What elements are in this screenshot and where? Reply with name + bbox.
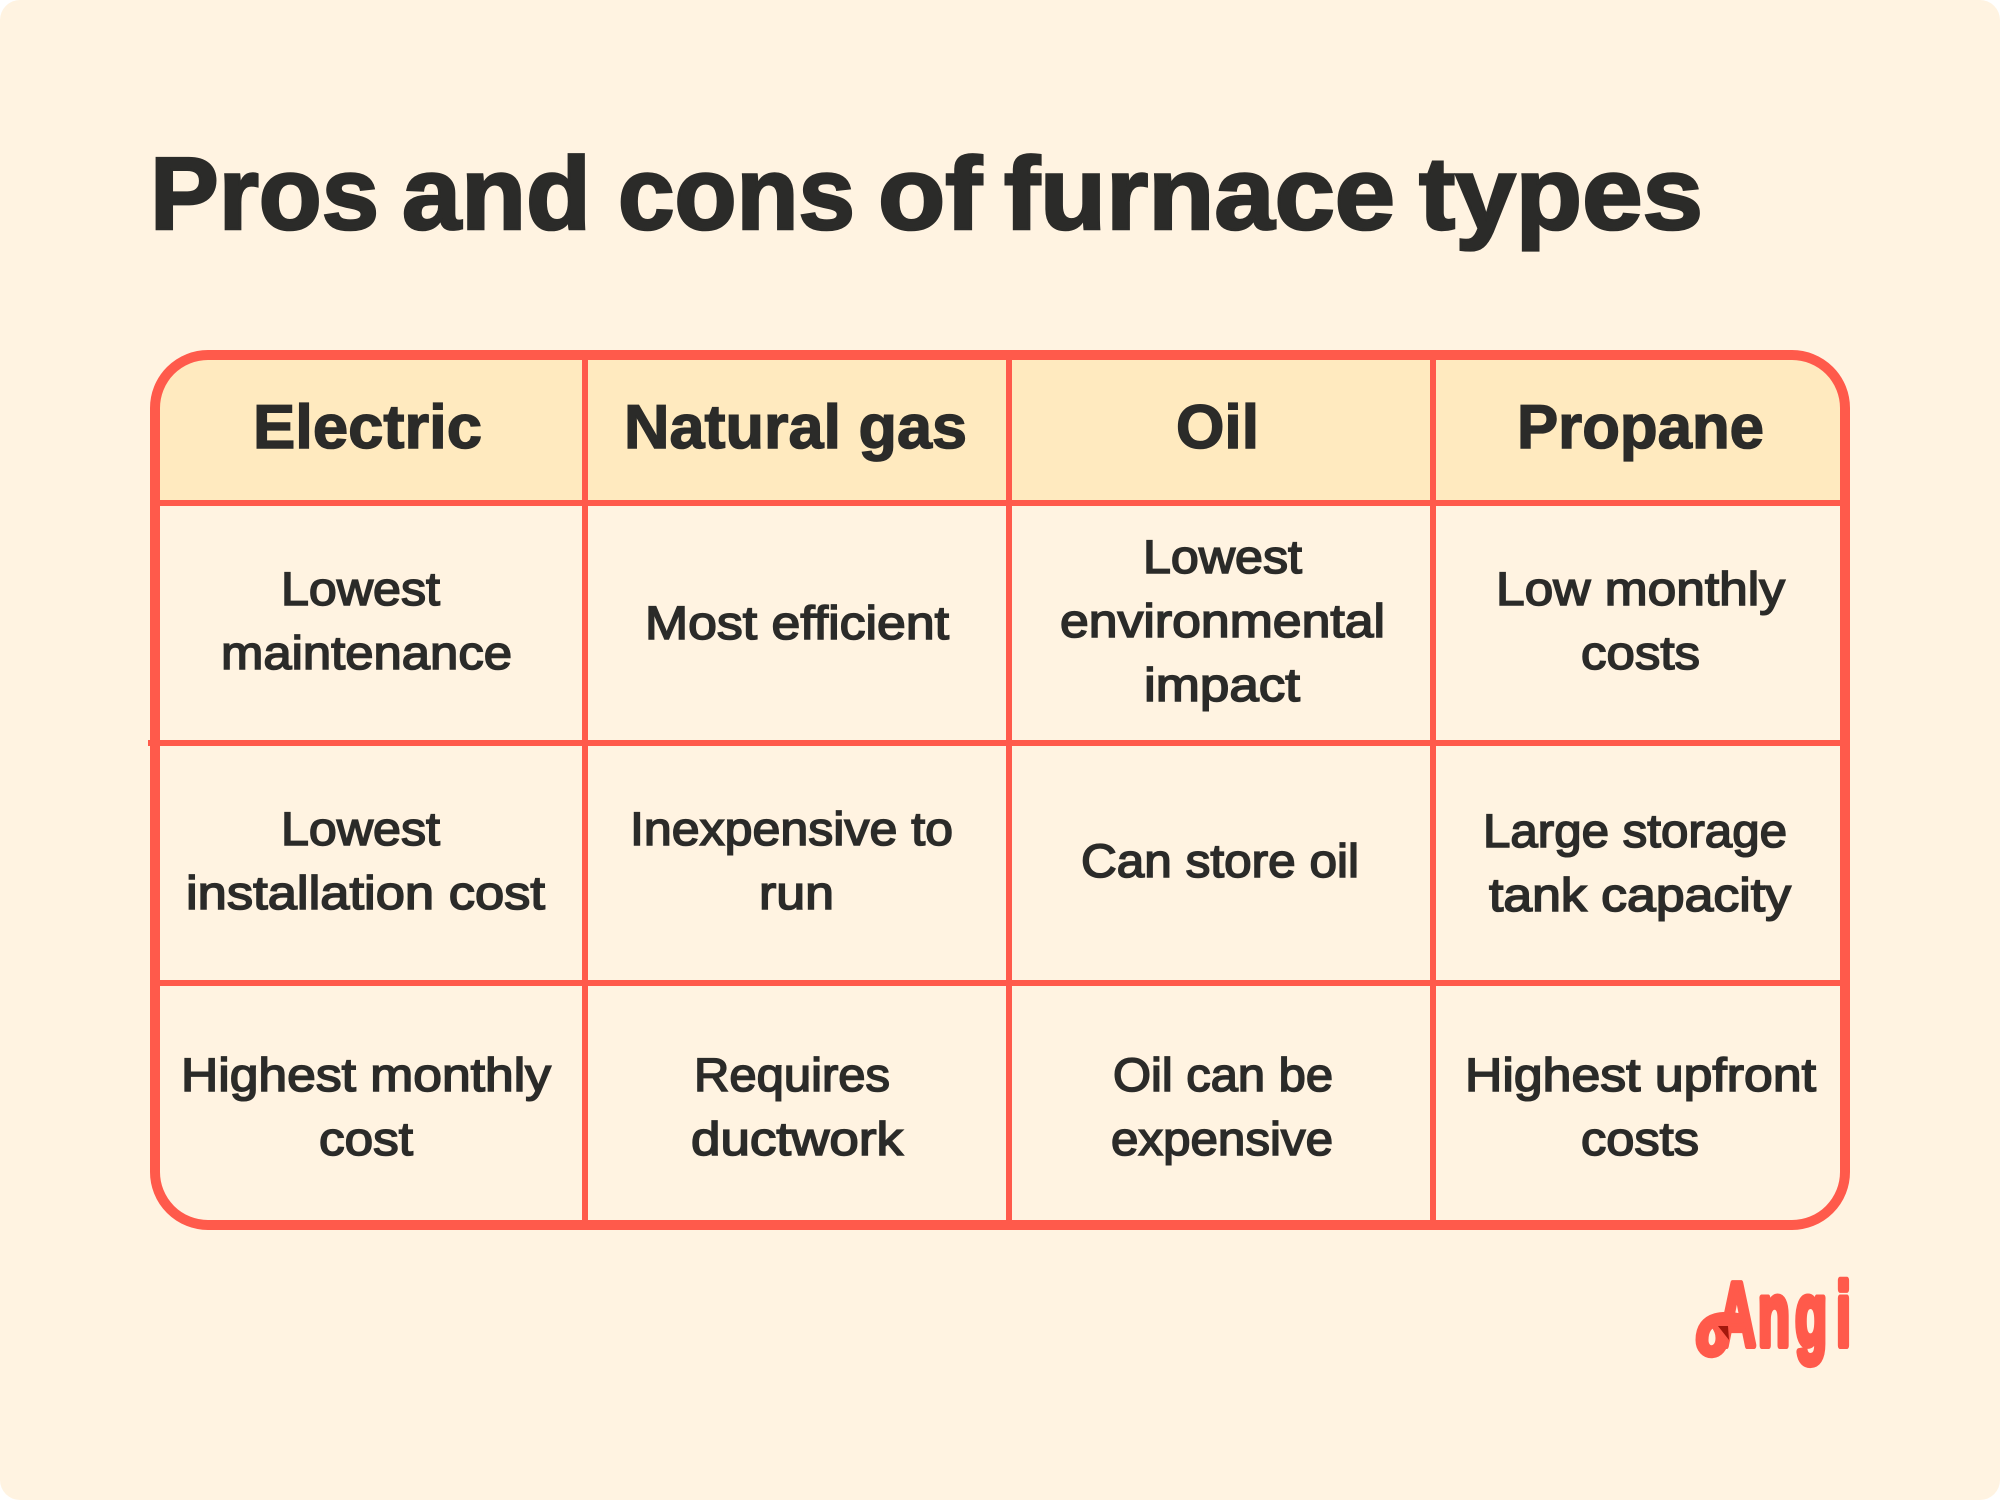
cell: Propane row 2: tank capacity — [1489, 868, 1792, 921]
table grid lines — [148, 355, 1845, 1225]
cell: Propane row 2: Large storage — [1483, 804, 1787, 857]
logo loop — [1702, 1318, 1745, 1352]
title: types — [1419, 136, 1703, 251]
cell: Oil row 3 — [1111, 1048, 1333, 1165]
cell: Propane row 1 — [1496, 562, 1786, 679]
logo loop shadow — [1718, 1326, 1729, 1340]
cell: Oil row 2: Can store oil — [1081, 834, 1359, 887]
title: and — [402, 136, 591, 251]
logo wordmark: Angi — [1718, 1266, 1851, 1366]
header row background — [155, 355, 1845, 500]
title: cons — [618, 136, 855, 251]
cell: Propane row 3: Highest upfront — [1465, 1048, 1816, 1101]
cell: Natural gas row 3 — [691, 1048, 904, 1165]
logo: Angi — [1702, 1266, 1851, 1366]
title: Pros — [150, 136, 379, 251]
header: Natural gas: Natural gas — [624, 393, 967, 462]
cell: Natural gas row 1: Most efficient — [645, 596, 949, 649]
cell: Electric row 3 — [181, 1048, 552, 1165]
table — [148, 355, 1845, 1225]
cell: Propane row 2 — [1483, 804, 1792, 921]
cell: Propane row 1: Low monthly — [1496, 562, 1786, 615]
cell: Electric row 3: cost — [319, 1112, 413, 1165]
title — [150, 136, 1703, 251]
header: Oil: Oil — [1176, 393, 1259, 462]
cell: Natural gas row 2: run — [759, 866, 834, 919]
title: furnace — [1004, 136, 1395, 251]
cell: Electric row 1: Lowest — [281, 562, 440, 615]
cell: Electric row 2 — [186, 802, 545, 919]
cell: Oil row 1: environmental — [1060, 594, 1385, 647]
table outer border — [155, 355, 1845, 1225]
cell: Natural gas row 3: Requires — [694, 1048, 890, 1101]
cell: Oil row 1: impact — [1144, 658, 1300, 711]
header: Electric: Electric — [253, 393, 482, 462]
cell: Electric row 1 — [221, 562, 512, 679]
cell: Oil row 3: expensive — [1111, 1112, 1333, 1165]
title: of — [878, 136, 983, 251]
cell: Natural gas row 2: Inexpensive to — [630, 802, 953, 855]
cell: Natural gas row 2 — [630, 802, 953, 919]
cell: Electric row 2: Lowest — [281, 802, 440, 855]
cell: Propane row 3: costs — [1581, 1112, 1699, 1165]
cell: Electric row 2: installation cost — [186, 866, 545, 919]
cell: Oil row 1 — [1060, 530, 1385, 711]
cell: Electric row 3: Highest monthly — [181, 1048, 552, 1101]
cell: Oil row 3: Oil can be — [1113, 1048, 1333, 1101]
cell: Electric row 1: maintenance — [221, 626, 512, 679]
header: Propane: Propane — [1517, 393, 1764, 462]
cell: Natural gas row 3: ductwork — [691, 1112, 904, 1165]
cell: Oil row 1: Lowest — [1143, 530, 1302, 583]
cell: Propane row 1: costs — [1581, 626, 1700, 679]
cell: Propane row 3 — [1465, 1048, 1816, 1165]
